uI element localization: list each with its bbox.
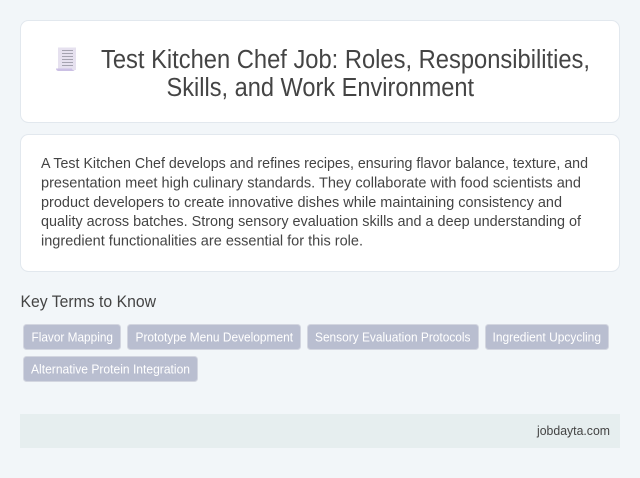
panel: description	[20, 134, 620, 272]
tag: flavor mapping: Flavor Mapping	[32, 330, 113, 344]
tag: alternative protein integration	[24, 356, 198, 382]
tag: prototype menu development: Prototype Menu Development	[136, 330, 293, 344]
tag: flavor mapping	[24, 324, 120, 350]
title: Skills, and Work Environment	[166, 74, 474, 102]
text block: description	[41, 155, 588, 250]
text block: description: A Test Kitchen Chef develops and refines recipes, ensuring flavor balance, texture, and	[41, 155, 588, 172]
title: Test Kitchen Chef Job: Roles, Responsibilities,	[101, 46, 590, 74]
panel: title card	[20, 20, 620, 122]
text block: description: presentation meet high culinary standards. They collaborate with food scientists and	[41, 174, 581, 192]
tag: ingredient upcycling	[486, 324, 608, 350]
tag: prototype menu development	[128, 324, 300, 350]
icon: recipe document	[56, 48, 76, 71]
tag: ingredient upcycling: Ingredient Upcycling	[492, 330, 601, 344]
tag: sensory evaluation protocols: Sensory Evaluation Protocols	[315, 330, 471, 344]
tag list	[24, 324, 608, 382]
text block: description: ingredient functionalities are essential for this role.	[41, 232, 363, 250]
tag: alternative protein integration: Alternative Protein Integration	[31, 362, 190, 376]
title	[101, 46, 590, 102]
footer	[20, 414, 620, 448]
text block: description: quality across batches. Strong sensory evaluation skills and a deep understanding of	[41, 213, 582, 230]
text block: description: product developers to create innovative dishes while maintaining consistency and	[41, 194, 562, 211]
tag: sensory evaluation protocols	[308, 324, 478, 350]
heading: key terms: Key Terms to Know	[20, 293, 156, 311]
footer: site name: jobdayta.com	[536, 424, 610, 438]
